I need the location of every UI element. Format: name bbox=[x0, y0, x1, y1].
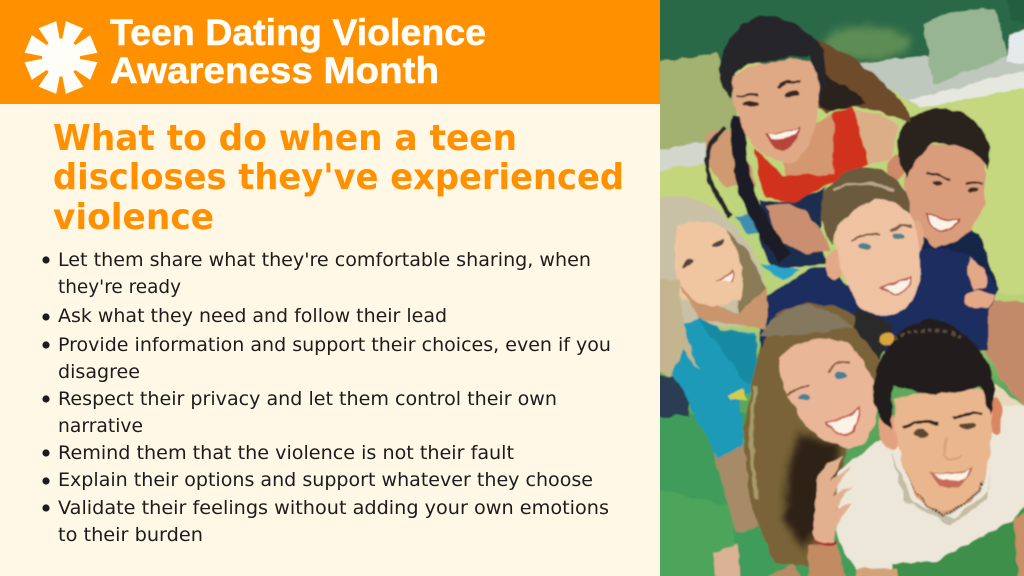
bullet list: they're ready bbox=[58, 277, 181, 298]
bullet list: Ask what they need and follow their lead bbox=[58, 306, 447, 327]
heading: What to do when a teen bbox=[53, 118, 517, 159]
heading: violence bbox=[53, 197, 214, 238]
bullet list: disagree bbox=[58, 362, 140, 383]
boy lower shirt bbox=[837, 406, 1024, 573]
bullet list: narrative bbox=[58, 416, 143, 437]
bullet list: Respect their privacy and let them control their own bbox=[58, 389, 557, 410]
bullet list: Let them share what they're comfortable sharing, when bbox=[58, 250, 591, 271]
teal shirt bbox=[667, 316, 757, 458]
blonde lower hair and neck bbox=[680, 286, 767, 329]
photo: group of smiling teens on grass bbox=[640, 0, 1024, 576]
bullet list: Explain their options and support whatever they choose bbox=[58, 470, 593, 491]
bullet list: Validate their feelings without adding your own emotions bbox=[58, 498, 609, 519]
title: Teen Dating Violence bbox=[110, 11, 486, 53]
icon: white asterisk logo bbox=[25, 21, 97, 94]
boy right bbox=[920, 229, 999, 290]
heading: discloses they've experienced bbox=[53, 157, 624, 198]
header banner bbox=[0, 0, 660, 104]
bullet list bbox=[42, 250, 611, 546]
hand on navy shirt bbox=[965, 290, 993, 308]
bullet list: Provide information and support their choices, even if you bbox=[58, 335, 611, 356]
front boy bbox=[911, 477, 986, 516]
bullet list: to their burden bbox=[58, 525, 203, 546]
heading bbox=[53, 118, 624, 238]
center boy bbox=[826, 250, 844, 280]
girl top: curls and body bbox=[707, 131, 757, 187]
panel: cream background bbox=[0, 0, 660, 576]
blue shirt boy bbox=[760, 247, 998, 353]
blonde girl head bbox=[660, 196, 764, 328]
hand on shoulder bbox=[808, 543, 847, 576]
background foliage and path bbox=[640, 0, 1024, 63]
title bbox=[110, 11, 486, 91]
title: Awareness Month bbox=[110, 49, 439, 91]
bullet list: Remind them that the violence is not their fault bbox=[58, 443, 514, 464]
girl lower hair bbox=[743, 304, 883, 566]
lower grass and right arm bbox=[660, 412, 764, 549]
